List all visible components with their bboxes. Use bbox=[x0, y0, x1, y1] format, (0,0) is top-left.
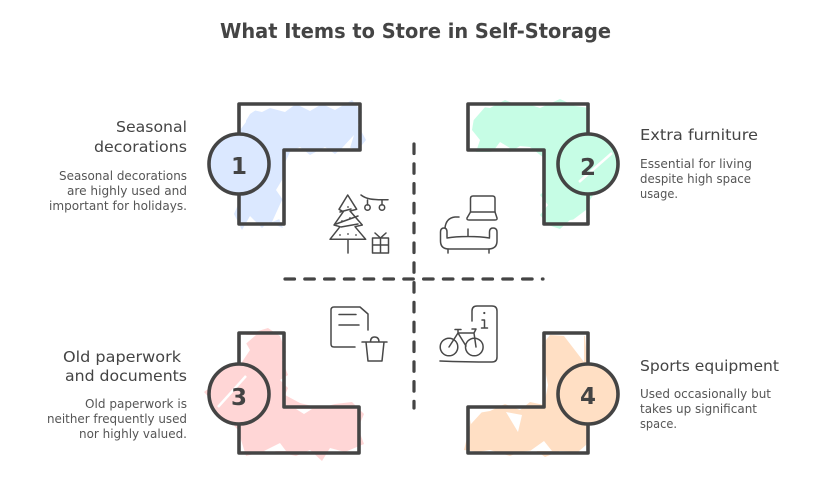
description 2: despite high space bbox=[640, 172, 751, 186]
description 1: Seasonal decorations bbox=[59, 169, 187, 183]
panel 4: sports equipment bbox=[440, 306, 779, 457]
number badge 2: 2 bbox=[580, 155, 596, 181]
heading 2: Extra furniture bbox=[640, 126, 758, 144]
description 3: neither frequently used bbox=[47, 412, 187, 426]
icon: christmas tree, garland and gift bbox=[330, 195, 388, 253]
description 4 bbox=[640, 387, 771, 431]
number badge 3: 3 bbox=[231, 385, 247, 411]
heading 1 bbox=[94, 118, 187, 156]
description 3: Old paperwork is bbox=[85, 397, 187, 411]
description 1 bbox=[49, 169, 187, 213]
description 1: important for holidays. bbox=[49, 199, 187, 213]
shape 1 outline bbox=[239, 104, 360, 224]
heading 4: Sports equipment bbox=[640, 357, 779, 375]
shape 2 sketch fill bbox=[470, 99, 618, 229]
divider: horizontal dashed line bbox=[285, 277, 543, 281]
heading 3 bbox=[63, 348, 187, 385]
title: What Items to Store in Self-Storage bbox=[220, 19, 611, 43]
description 2: usage. bbox=[640, 187, 678, 201]
divider: vertical dashed line bbox=[412, 144, 416, 408]
shape 4 outline bbox=[468, 333, 588, 453]
shape 4 sketch fill bbox=[464, 335, 612, 457]
heading 3: Old paperwork bbox=[63, 348, 181, 366]
panel 3: old paperwork and documents bbox=[47, 307, 387, 461]
number badge 4: 4 bbox=[580, 384, 596, 410]
shape 3 sketch fill bbox=[204, 328, 364, 461]
description 1: are highly used and bbox=[67, 184, 187, 198]
shape 2 outline bbox=[468, 104, 588, 224]
description 2: Essential for living bbox=[640, 157, 752, 171]
description 4: Used occasionally but bbox=[640, 387, 771, 401]
shape 1 sketch fill bbox=[234, 100, 366, 230]
number badge 3 bbox=[209, 364, 269, 424]
panel 2: extra furniture bbox=[440, 99, 758, 253]
panel 1: seasonal decorations bbox=[49, 100, 388, 253]
shape 3 outline bbox=[239, 333, 359, 453]
icon: bicycle and info panel bbox=[440, 306, 497, 362]
description 3 bbox=[47, 397, 187, 441]
heading 3: and documents bbox=[65, 367, 187, 385]
description 4: space. bbox=[640, 417, 677, 431]
description 2 bbox=[640, 157, 752, 201]
description 4: takes up significant bbox=[640, 402, 757, 416]
heading 1: decorations bbox=[94, 138, 187, 156]
number badge 4 bbox=[558, 364, 618, 424]
icon: document and trash can bbox=[331, 307, 387, 361]
number badge 2 bbox=[558, 134, 618, 194]
description 3: nor highly valued. bbox=[79, 427, 187, 441]
icon: sofa and lamp bbox=[440, 196, 497, 253]
number badge 1 bbox=[209, 134, 269, 194]
heading 1: Seasonal bbox=[116, 118, 187, 136]
number badge 1: 1 bbox=[231, 154, 247, 180]
